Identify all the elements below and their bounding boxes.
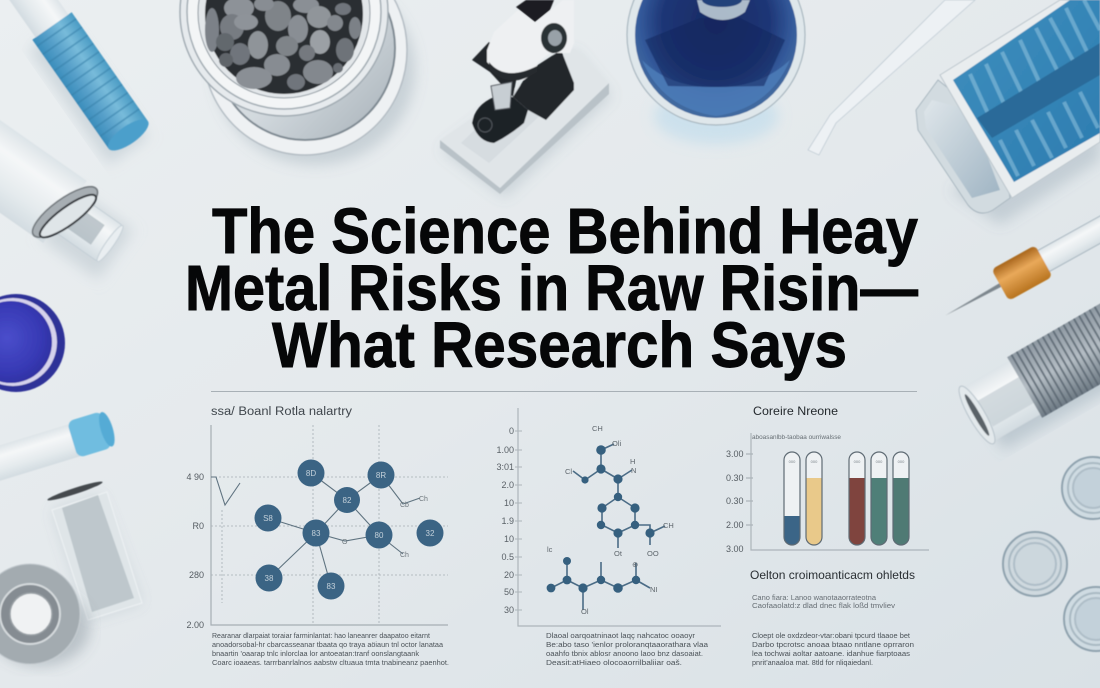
heading: tube notes: Oelton croimoanticacm ohletds xyxy=(750,568,915,582)
chart axes xyxy=(518,408,721,626)
caption: Rearanar dlarpaiat toraiar farminlantat: hao laneanrer daapatoo eitarnt xyxy=(212,631,431,640)
caption: pnrit'anaaloa mat. 8tld for nliqaiedanl. xyxy=(752,658,873,667)
caption: Be:abo taso 'ienlor proloranqtaaorathara vlaa xyxy=(546,640,709,649)
icon: metal container with grey granules xyxy=(180,0,415,165)
caption xyxy=(752,631,914,667)
icon: glass pipette xyxy=(808,0,975,155)
small atom labels: Ch xyxy=(419,496,428,503)
small atom labels: Cb xyxy=(400,502,409,509)
tube: green xyxy=(871,452,887,545)
white head xyxy=(487,0,574,80)
panel: tube chart xyxy=(726,404,929,667)
axis labels: 20 xyxy=(504,570,514,580)
tube tick labels: 000 xyxy=(876,459,883,464)
axis labels: 4 90 xyxy=(186,472,204,482)
icon: microscope xyxy=(440,0,612,198)
node labels: 8D xyxy=(306,469,316,478)
atom labels: Cl xyxy=(565,467,572,476)
small atom labels: Ch xyxy=(400,552,409,559)
node labels: 80 xyxy=(375,531,384,540)
axis labels: 2.0 xyxy=(501,480,514,490)
molecule atoms xyxy=(547,445,655,593)
icon: metal ring bottom left xyxy=(0,564,90,666)
molecule bonds xyxy=(551,444,665,610)
caption: Dlaoal oarqoatninaot laqç nahcatoc ooaoyr xyxy=(546,631,695,640)
axis labels: 3.00 xyxy=(726,449,744,459)
sub text xyxy=(752,593,895,610)
icon: syringe with orange collar xyxy=(936,194,1100,331)
objective lens xyxy=(491,82,512,110)
tube: yellow xyxy=(806,452,822,545)
icon: blue grip tube xyxy=(0,0,155,165)
tube tick labels: 000 xyxy=(811,459,818,464)
node labels: 38 xyxy=(265,574,274,583)
atom labels: H xyxy=(630,457,635,466)
axis labels: 2.00 xyxy=(726,520,744,530)
network links xyxy=(211,473,420,586)
panel: molecule chart xyxy=(496,408,721,667)
axis labels: 0.30 xyxy=(726,496,744,506)
icon: purple disk cap xyxy=(0,294,65,392)
axis labels: 2.00 xyxy=(186,620,204,630)
node labels: 32 xyxy=(426,529,435,538)
tube tick labels: 000 xyxy=(898,459,905,464)
axis labels: 0.5 xyxy=(501,552,514,562)
axis labels: 3.00 xyxy=(726,544,744,554)
axis labels: 0 xyxy=(509,426,514,436)
node labels: 83 xyxy=(312,529,321,538)
caption: Deasit:atHiaeo olocoaorrilbaliiar oaš. xyxy=(546,658,682,667)
icon: glass rings xyxy=(1003,457,1100,651)
small atom labels: O xyxy=(342,539,348,546)
atom labels: lc xyxy=(547,545,553,554)
small chart subtitle: aboasanlbb-taobaa ourriwalsse xyxy=(752,435,842,441)
atom labels: OO xyxy=(647,549,659,558)
axis labels xyxy=(496,426,514,615)
axis labels xyxy=(726,449,744,554)
atom labels: Ol xyxy=(581,607,589,616)
node labels xyxy=(263,469,435,591)
axis labels: 1.9 xyxy=(501,516,514,526)
node labels: S8 xyxy=(263,514,273,523)
atom labels: NI xyxy=(650,585,658,594)
heading: tube chart: Coreire Nreone xyxy=(753,404,838,418)
caption: lea tochwai aoltar aatoane. idanhue fiarptoaas xyxy=(752,649,910,658)
tube: blue xyxy=(784,452,800,545)
caption: Darbo tpcrotsc anoaa btaao nntlane oprraron xyxy=(752,640,914,649)
atom labels: N xyxy=(631,466,636,475)
atom labels: ⊕ xyxy=(632,560,638,569)
axis labels xyxy=(186,472,204,630)
tube: red xyxy=(849,452,865,545)
axis labels: 10 xyxy=(504,534,514,544)
atom labels: Ot xyxy=(614,549,623,558)
axis labels: 3:01 xyxy=(496,462,514,472)
caption: Cloept ole oxdzdeor-vtar:obani tpcurd tlaaoe bet xyxy=(752,631,911,640)
caption: Coarc ioaaeas. tarrrbanrlalnos aabstw cltuaua tmta tnabineanz paenhot. xyxy=(212,658,449,667)
icon: clear vial xyxy=(46,479,142,620)
axis labels: 0.30 xyxy=(726,473,744,483)
icon: glass cylinder with metal coil xyxy=(953,292,1100,457)
sub text: Cano fiara: Lanoo wanotaaorrateotna xyxy=(752,593,877,602)
caption: anoadorsobal-hr cbarcasseanar tbaata qo traya aöiaun tnl octor lanataa xyxy=(212,640,444,649)
caption xyxy=(546,631,709,667)
heading: network chart: ssa/ Boanl Rotla nalartry xyxy=(211,406,352,418)
title: Metal Risks in Raw Risin— xyxy=(185,252,918,324)
axis labels: 50 xyxy=(504,587,514,597)
axis labels: 280 xyxy=(189,570,204,580)
sub text: Caofaaolatd:z dlad dnec flak loßd tmvliev xyxy=(752,601,895,610)
caption xyxy=(212,631,449,667)
node labels: 83 xyxy=(327,582,336,591)
axis labels: 30 xyxy=(504,605,514,615)
caption: oaahfo tbnix ablosr anoono laoo bnz dasoaiat. xyxy=(546,649,703,658)
axis ticks xyxy=(515,431,522,610)
panel: network chart xyxy=(186,406,449,667)
divider rule xyxy=(211,391,917,392)
network nodes xyxy=(254,460,444,600)
title xyxy=(185,195,918,381)
atom labels: Oli xyxy=(612,439,622,448)
title: What Research Says xyxy=(272,309,847,381)
tube: teal xyxy=(893,452,909,545)
axis labels: R0 xyxy=(192,521,204,531)
grey granules xyxy=(205,0,361,90)
title: The Science Behind Heay xyxy=(212,195,918,267)
axis labels: 10 xyxy=(504,498,514,508)
tube tick labels xyxy=(789,459,905,464)
icon: test tube with blue cap xyxy=(0,409,118,483)
node labels: 82 xyxy=(343,496,352,505)
chart axes and grid xyxy=(211,425,448,625)
node labels: 8R xyxy=(376,471,386,480)
tube tick labels: 000 xyxy=(789,459,796,464)
small atom labels xyxy=(342,496,428,559)
tube tick labels: 000 xyxy=(854,459,861,464)
icon: blue round flask xyxy=(627,0,805,144)
axis labels: 1.00 xyxy=(496,445,514,455)
icon: blue sample rack xyxy=(916,0,1100,225)
chart axes xyxy=(746,433,929,550)
atom labels: CH xyxy=(592,424,603,433)
icon: clear syringe with metal ring xyxy=(0,115,143,284)
caption: bnaartin 'oaarap tnlc inlorclaa lor antoeatan:tranf oonslangtaank xyxy=(212,649,419,658)
atom labels xyxy=(547,424,674,616)
atom labels: CH xyxy=(663,521,674,530)
microscope foot and stage xyxy=(472,97,528,143)
